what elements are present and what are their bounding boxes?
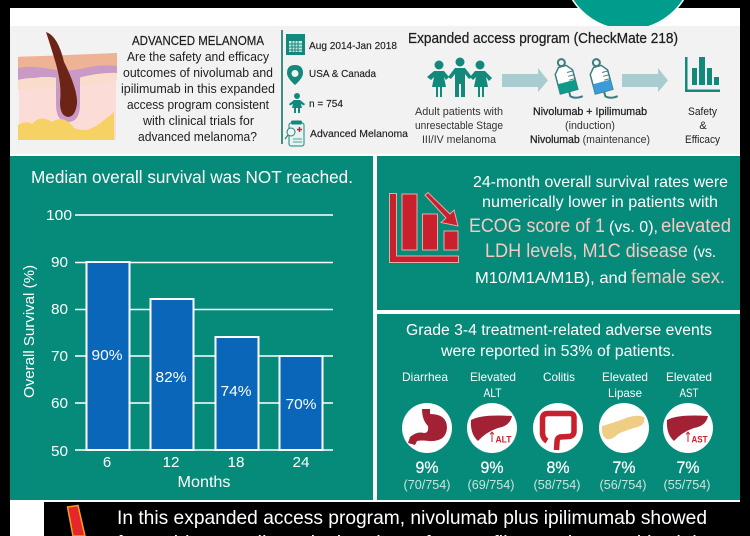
text block: subgroup findings: (vs. 0), xyxy=(609,219,658,236)
adverse event: colitis: Colitis xyxy=(543,370,575,384)
text block: research question: advanced melanoma? xyxy=(138,130,257,144)
label: sample size: n = 754 xyxy=(309,98,343,110)
panel: conclusion xyxy=(44,503,750,536)
icon: hair shaft xyxy=(46,32,77,117)
adverse event: elevated lipase xyxy=(599,370,649,492)
bar chart: 50 xyxy=(51,443,68,460)
panel: survival subgroups xyxy=(377,156,740,310)
bar chart xyxy=(21,207,333,491)
adverse event: colitis xyxy=(533,370,583,492)
text block: subgroup findings: elevated xyxy=(661,216,731,237)
adverse event: elevated AST: Elevated xyxy=(666,370,712,384)
bar chart: 70% xyxy=(286,396,316,413)
adverse event: elevated ALT: Elevated xyxy=(470,370,516,384)
label: study dates: Aug 2014-Jan 2018 xyxy=(309,40,397,52)
circular badge at top xyxy=(562,0,694,30)
heading: median overall survival: Median overall survival was NOT reached. xyxy=(31,167,353,187)
text block: outcomes: & xyxy=(699,120,707,132)
heading: adverse events xyxy=(406,322,712,360)
text block: research question: Are the safety and efficacy xyxy=(127,50,270,64)
bar chart: Months xyxy=(178,474,230,491)
icon: patient figure xyxy=(289,93,305,113)
adverse event: colitis: (58/754) xyxy=(534,478,580,492)
adverse event: elevated AST: AST xyxy=(680,386,699,400)
adverse event: diarrhea: 9% xyxy=(416,458,438,477)
text block: subgroup findings: M10/M1A/M1B), and xyxy=(475,270,627,287)
icon: outcome bar chart xyxy=(685,57,720,92)
text block: treatment xyxy=(530,106,650,146)
bar chart: 6 xyxy=(103,454,111,471)
label: location: USA & Canada xyxy=(309,68,376,80)
heading: adverse events: were reported in 53% of patients. xyxy=(440,343,675,360)
text block: subgroup findings: numerically lower in patients with xyxy=(482,194,718,211)
adverse event: diarrhea xyxy=(402,370,452,492)
text block: research question: ipilimumab in this expanded xyxy=(121,82,275,96)
panel: adverse events xyxy=(377,314,740,500)
text block: subgroup findings: ECOG score of 1 xyxy=(469,216,605,237)
adverse event: elevated ALT xyxy=(467,370,517,492)
adverse event: elevated ALT: (69/754) xyxy=(468,478,514,492)
adverse event: elevated AST: 7% xyxy=(676,458,700,477)
bar chart: 24 xyxy=(292,454,310,471)
adverse event: diarrhea: Diarrhea xyxy=(402,370,448,384)
icon: clipboard with magnifier xyxy=(285,120,304,146)
icon: calendar xyxy=(286,34,305,55)
icon: IV bag, ipilimumab xyxy=(587,56,618,102)
text block: research question: access program consistent xyxy=(127,98,269,112)
arrow: population to treatment xyxy=(502,68,548,92)
text block: research question: with clinical trials for xyxy=(142,114,254,128)
text block: population xyxy=(415,106,503,146)
icon: IV bag, nivolumab xyxy=(552,56,583,102)
icon: declining bar chart xyxy=(390,192,458,262)
text block: population: unresectable Stage xyxy=(415,120,503,132)
bar chart: 90% xyxy=(92,347,122,364)
adverse event: elevated AST: (55/754) xyxy=(664,478,710,492)
arrow: treatment to outcomes xyxy=(622,68,668,92)
bar chart: 74% xyxy=(220,383,252,400)
text block: outcomes: Efficacy xyxy=(685,134,720,146)
text block: subgroup findings: (vs. xyxy=(693,244,716,261)
label: disease: Advanced Melanoma xyxy=(310,128,408,140)
adverse event: colitis: 8% xyxy=(546,458,570,477)
icon: exclamation mark xyxy=(68,506,85,536)
text block: research question xyxy=(121,34,275,144)
text block: outcomes: Safety xyxy=(688,106,717,118)
bar chart: Overall Survival (%) xyxy=(21,265,38,398)
panel: median overall survival chart xyxy=(10,156,373,500)
bar chart: 100 xyxy=(46,207,72,224)
text block: outcomes xyxy=(685,106,720,146)
text block: treatment: Nivolumab + Ipilimumab xyxy=(533,106,647,118)
text block: research question: ADVANCED MELANOMA xyxy=(132,34,265,48)
text block: research question: outcomes of nivolumab and xyxy=(123,66,273,80)
bar chart: 60 xyxy=(51,395,68,412)
adverse event: diarrhea: (70/754) xyxy=(404,478,450,492)
icon: three patients xyxy=(427,58,492,97)
text block: subgroup findings: LDH levels, M1C disease xyxy=(485,241,688,262)
text block: population: III/IV melanoma xyxy=(422,134,497,146)
text block: population: Adult patients with xyxy=(415,106,503,118)
icon: skin cross-section with hair follicle xyxy=(18,32,117,140)
text block: treatment: (induction) xyxy=(565,120,615,132)
text block: subgroup findings: female sex. xyxy=(631,267,725,288)
panel: study overview header xyxy=(10,26,740,154)
bar chart: 80 xyxy=(51,301,68,318)
bar chart: 12 xyxy=(162,454,180,471)
bar chart: 90 xyxy=(51,254,68,271)
adverse event: elevated lipase: (56/754) xyxy=(600,478,646,492)
adverse event: elevated ALT: ALT xyxy=(484,386,502,400)
adverse event: elevated lipase: 7% xyxy=(612,458,636,477)
bar chart: 70 xyxy=(51,348,68,365)
text block: subgroup findings: 24-month overall survival rates were xyxy=(473,174,728,191)
text block: treatment: Nivolumab (maintenance) xyxy=(530,134,650,146)
adverse event: elevated lipase: Lipase xyxy=(608,386,642,400)
text block: conclusion: In this expanded access program, nivolumab plus ipilimumab showed xyxy=(117,507,707,529)
bar chart: 18 xyxy=(228,454,244,471)
adverse event: elevated AST xyxy=(663,370,713,492)
adverse event: elevated ALT: ALT xyxy=(496,434,512,446)
bar chart: 82% xyxy=(156,369,186,386)
heading: expanded access program: Expanded access program (CheckMate 218) xyxy=(408,31,678,47)
heading: adverse events: Grade 3-4 treatment-related adverse events xyxy=(406,322,712,339)
adverse event: elevated AST: AST xyxy=(692,434,708,446)
adverse event: elevated ALT: 9% xyxy=(480,458,504,477)
icon: location pin xyxy=(287,65,303,85)
text block: subgroup findings xyxy=(469,174,731,288)
adverse event: elevated lipase: Elevated xyxy=(602,370,648,384)
